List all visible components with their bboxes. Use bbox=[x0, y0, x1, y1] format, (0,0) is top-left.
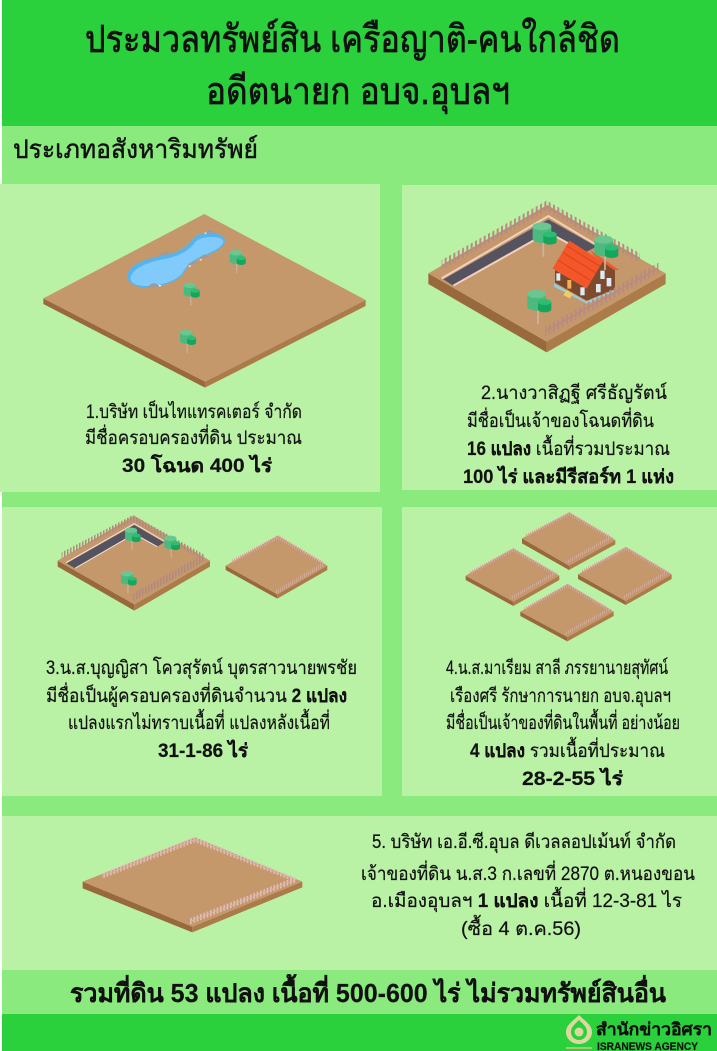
illustration: fenced plot bbox=[226, 535, 327, 599]
text block 5 bbox=[361, 831, 695, 940]
illustration: large fenced plot bbox=[83, 837, 302, 932]
text block 1: 30 โฉนด 400 ไร่ bbox=[122, 454, 273, 477]
text block 1 bbox=[85, 399, 302, 477]
footer band bbox=[2, 1014, 717, 1051]
panel 1: company land bbox=[0, 184, 380, 492]
text block 3 bbox=[46, 656, 357, 762]
text block 4: 4 แปลง รวมเนื้อที่ประมาณ bbox=[470, 737, 665, 762]
text block 3: 3.น.ส.บุญญิสา โควสุรัตน์ บุตรสาวนายพรชัย bbox=[46, 656, 357, 680]
header band bbox=[2, 0, 717, 126]
text block 5: อ.เมืองอุบลฯ 1 แปลง เนื้อที่ 12-3-81 ไร bbox=[371, 887, 682, 913]
text block 1: มีชื่อครอบครองที่ดิน ประมาณ bbox=[85, 424, 302, 449]
illustration: fenced plot with road and trees bbox=[58, 515, 210, 611]
text block 2: 2.นางวาสิฏฐี ศรีธัญรัตน์ bbox=[481, 382, 667, 404]
illustration: four fenced plots bbox=[466, 512, 672, 641]
text block 1: 1.บริษัท เป็นไทแทรคเตอร์ จำกัด bbox=[86, 399, 302, 423]
text block 2 bbox=[463, 382, 674, 488]
text block 2: 16 แปลง เนื้อที่รวมประมาณ bbox=[467, 435, 670, 460]
illustration: land with house, road, fence and trees bbox=[428, 201, 666, 352]
panel 5: company plot bbox=[2, 816, 717, 970]
text block 4: 28-2-55 ไร่ bbox=[522, 767, 624, 790]
total summary: รวมที่ดิน 53 แปลง เนื้อที่ 500-600 ไร่ ไม่รวมทรัพย์สินอื่น bbox=[70, 973, 666, 1008]
logo wordmark Thai: สำนักข่าวอิศรา bbox=[596, 1020, 712, 1039]
text block 5: (ซื้อ 4 ต.ค.56) bbox=[461, 915, 581, 940]
text block 2: 100 ไร่ และมีรีสอร์ท 1 แห่ง bbox=[463, 465, 674, 488]
text block 3: แปลงแรกไม่ทราบเนื้อที่ แปลงหลังเนื้อที่ bbox=[68, 709, 330, 734]
section heading: ประเภทอสังหาริมทรัพย์ bbox=[13, 134, 258, 164]
icon: house bbox=[553, 241, 619, 304]
panel 2: land with house bbox=[402, 185, 717, 490]
panel 3: two plots bbox=[2, 507, 382, 796]
title line 1: ประมวลทรัพย์สิน เครือญาติ-คนใกล้ชิด bbox=[85, 18, 620, 61]
text block 3: มีชื่อเป็นผู้ครอบครองที่ดินจำนวน 2 แปลง bbox=[46, 682, 347, 707]
text block 5: 5. บริษัท เอ.อี.ซี.อุบล ดีเวลลอปเม้นท์ จำกัด bbox=[372, 831, 676, 854]
illustration: land with lake and trees bbox=[43, 214, 366, 388]
icon: Isranews logo bbox=[566, 1015, 592, 1049]
panel 4: four plots bbox=[402, 507, 717, 796]
text block 4 bbox=[446, 657, 680, 790]
title line 2: อดีตนายก อบจ.อุบลฯ bbox=[206, 71, 510, 114]
text block 3: 31-1-86 ไร่ bbox=[158, 739, 249, 762]
text block 2: มีชื่อเป็นเจ้าของโฉนดที่ดิน bbox=[467, 407, 654, 432]
